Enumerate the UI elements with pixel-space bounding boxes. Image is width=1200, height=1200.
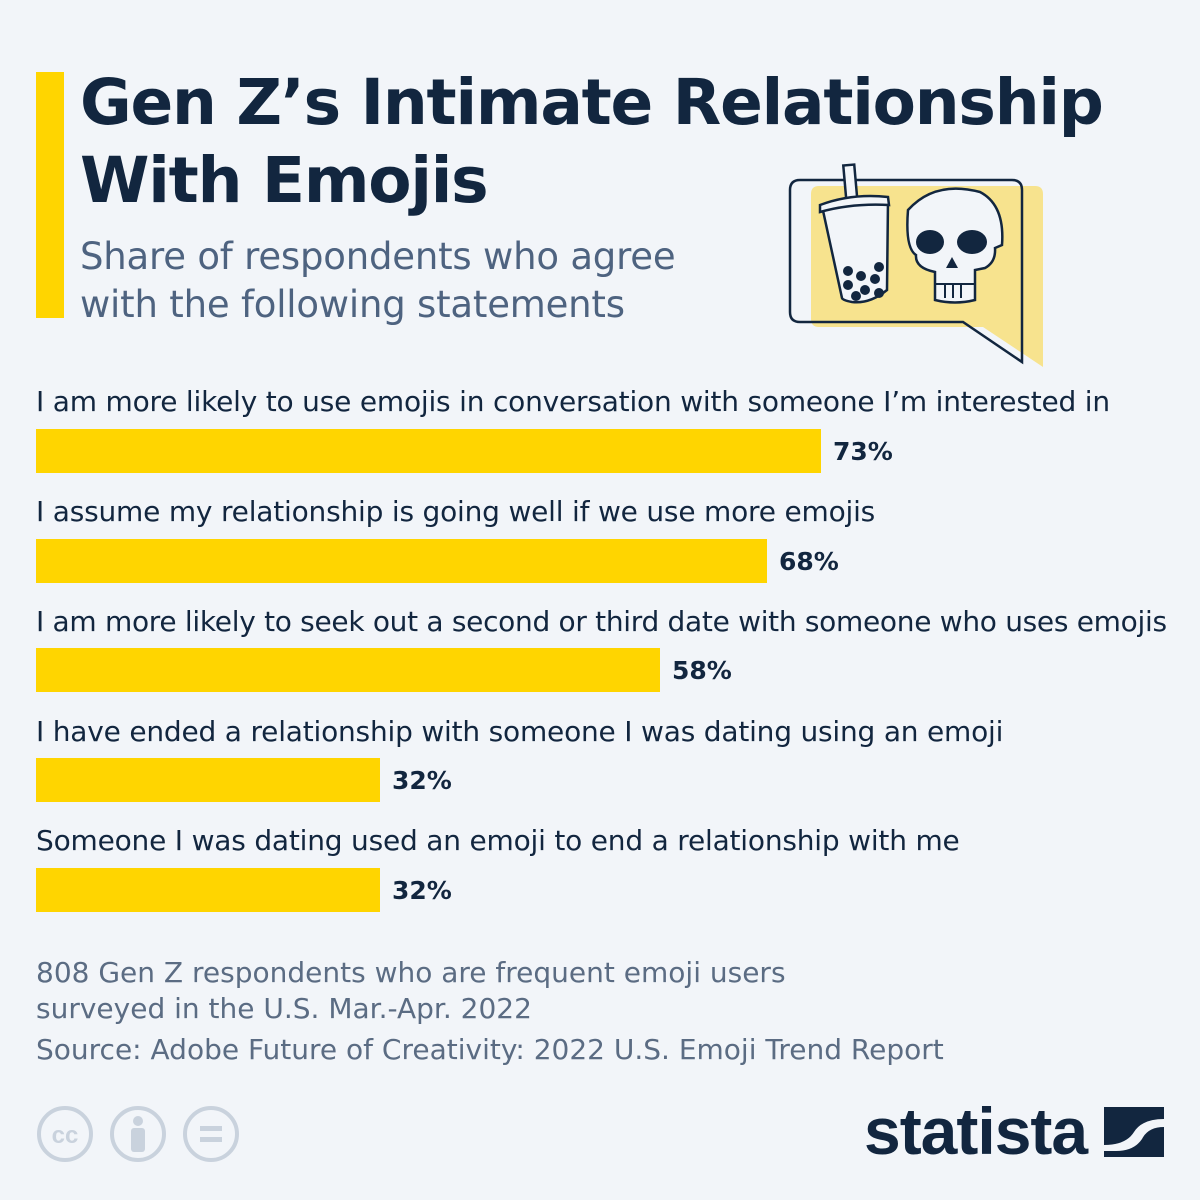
row 3: I am more likely to seek out a second or third date with someone who uses emojis	[36, 605, 1167, 638]
text: 32%	[392, 876, 452, 905]
title: With Emojis	[80, 144, 487, 217]
row 1: I am more likely to use emojis in conversation with someone I’m interested in	[36, 385, 1110, 418]
subtitle: Share of respondents who agree	[80, 235, 675, 278]
license icons: cc	[52, 1122, 78, 1149]
title	[80, 66, 1103, 217]
text: 68%	[779, 547, 839, 576]
statista logo: statista	[864, 1094, 1087, 1168]
footnote: surveyed in the U.S. Mar.-Apr. 2022	[36, 992, 532, 1025]
icon: speech bubble with boba and skull	[788, 163, 1043, 367]
footnote	[36, 956, 786, 1025]
row 5: Someone I was dating used an emoji to end a relationship with me	[36, 824, 960, 857]
footnote: 808 Gen Z respondents who are frequent emoji users	[36, 956, 786, 989]
subtitle	[80, 235, 675, 326]
subtitle: with the following statements	[80, 283, 625, 326]
title: Gen Z’s Intimate Relationship	[80, 66, 1103, 139]
text: 32%	[392, 766, 452, 795]
accent bar	[36, 72, 64, 318]
text: 73%	[833, 437, 893, 466]
text: 58%	[672, 656, 732, 685]
row 2: I assume my relationship is going well if we use more emojis	[36, 495, 875, 528]
license icons	[37, 1106, 239, 1162]
source: Source: Adobe Future of Creativity: 2022 U.S. Emoji Trend Report	[36, 1033, 944, 1066]
row 4: I have ended a relationship with someone I was dating using an emoji	[36, 715, 1003, 748]
